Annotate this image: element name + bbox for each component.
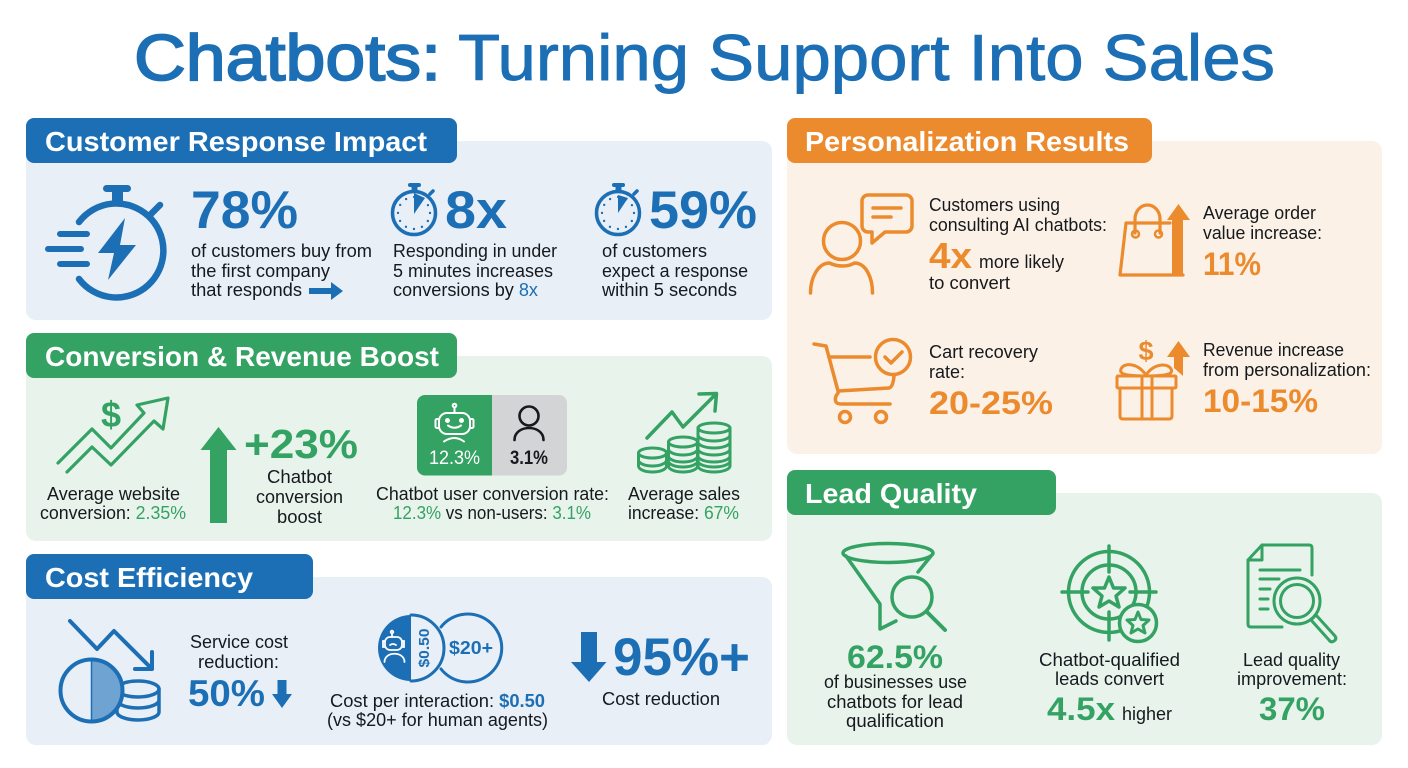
stat: 4.5x higher: leads convert xyxy=(1055,669,1164,689)
icon: document with magnifier xyxy=(1248,545,1336,642)
stat: +23%: conversion xyxy=(256,487,343,507)
stat: 78%: that responds xyxy=(191,280,302,300)
stat: 59%: of customers xyxy=(602,241,707,261)
stat: cart recovery: Cart recovery xyxy=(929,342,1038,362)
stat: 62.5% xyxy=(824,639,967,731)
stat: 4x more likely xyxy=(929,195,1107,293)
stat: 62.5%: chatbots for lead xyxy=(827,692,963,712)
heading: personalization results: Personalization Results xyxy=(805,126,1129,157)
stat: revenue increase xyxy=(1203,340,1371,419)
stat: 59% xyxy=(601,181,757,300)
stat: 4x more likely: Customers using xyxy=(929,195,1060,215)
heading: conversion and revenue boost: Conversion & Revenue Boost xyxy=(45,341,439,372)
stat: 4.5x higher xyxy=(1039,650,1180,727)
icon: target with stars xyxy=(1062,546,1156,642)
title xyxy=(134,21,1275,94)
stat: 78%: the first company xyxy=(191,261,330,281)
stat: 4x more likely: consulting AI chatbots: xyxy=(929,215,1107,235)
stat: 4.5x higher: higher xyxy=(1122,704,1172,724)
icon: person xyxy=(514,406,544,440)
heading: lead quality xyxy=(787,470,1056,515)
icon: funnel with magnifier xyxy=(843,544,945,630)
panel: customer response impact xyxy=(26,118,772,320)
stat: 4x more likely: more likely xyxy=(979,252,1064,272)
icon: up arrow xyxy=(200,427,236,523)
icon: gift with dollar and arrow xyxy=(1117,336,1190,419)
stat: 8x: Responding in under xyxy=(393,241,557,261)
text: average website conversion xyxy=(40,484,186,523)
heading: lead quality: Lead Quality xyxy=(805,478,978,509)
text: average sales increase xyxy=(628,484,740,523)
icon: cost comparison coins xyxy=(376,614,502,682)
stat: 95%+ xyxy=(602,628,750,709)
stat: 37%: improvement: xyxy=(1237,669,1347,689)
stat: 11%: Average order xyxy=(1203,203,1316,223)
stat: 78% xyxy=(191,181,372,300)
icon: stopwatch 59% xyxy=(596,183,640,234)
stat: service cost reduction xyxy=(188,632,292,714)
text: average website conversion: conversion: 2.35% xyxy=(40,503,186,523)
stat: 4.5x higher: Chatbot-qualified xyxy=(1039,650,1180,670)
text: chatbot user conversion rate: 12.3% vs non-users: 3.1% xyxy=(393,503,591,523)
stat: 11% xyxy=(1203,203,1322,282)
stat: 59%: within 5 seconds xyxy=(601,280,737,300)
icon: gift with dollar and arrow: $ xyxy=(1138,336,1154,366)
stat: revenue increase: 10-15% xyxy=(1203,383,1318,419)
text: average sales increase: increase: 67% xyxy=(628,503,739,523)
icon: down arrow xyxy=(272,680,292,708)
stat: 4x more likely: to convert xyxy=(929,273,1010,293)
stat: 78%: 78% xyxy=(191,181,298,240)
stat: 59%: 59% xyxy=(649,181,757,240)
title: Chatbots: xyxy=(134,21,441,94)
icon: shopping bag with up arrow xyxy=(1120,204,1190,276)
stat: +23%: Chatbot xyxy=(267,467,332,487)
panel: conversion and revenue boost xyxy=(26,333,772,541)
icon: right arrow xyxy=(309,282,343,300)
text: chatbot user conversion rate: Chatbot user conversion rate: xyxy=(376,484,609,504)
icon: stopwatch 8x xyxy=(392,183,436,234)
stat: 62.5%: of businesses use xyxy=(824,672,967,692)
text: chatbot user conversion rate xyxy=(376,484,609,523)
stat: 78%: of customers buy from xyxy=(191,241,372,261)
chart: chatbot vs non-user comparison: 12.3% xyxy=(429,448,480,469)
icon: falling cost with coins xyxy=(60,621,159,722)
panel: personalization results xyxy=(787,118,1382,454)
heading: conversion and revenue boost xyxy=(26,333,457,378)
text: average website conversion: Average website xyxy=(47,484,180,504)
stat: cart recovery: rate: xyxy=(929,362,965,382)
stat: 37% xyxy=(1237,650,1347,727)
icon: dollar growth arrow: $ xyxy=(101,394,121,435)
stat: 11%: 11% xyxy=(1203,246,1261,282)
stat: 8x: conversions by 8x xyxy=(393,280,538,300)
stat: 62.5%: qualification xyxy=(846,711,944,731)
chart: chatbot vs non-user comparison xyxy=(417,395,567,476)
stat: service cost reduction: reduction: xyxy=(198,652,279,672)
heading: customer response impact xyxy=(26,118,457,163)
chart: chatbot vs non-user comparison: 3.1% xyxy=(510,448,548,469)
stat: 37%: Lead quality xyxy=(1243,650,1340,670)
heading: cost efficiency: Cost Efficiency xyxy=(45,562,254,593)
stat: 62.5%: 62.5% xyxy=(847,639,943,675)
stat: +23% xyxy=(244,421,358,527)
panel: lead quality xyxy=(787,470,1382,745)
icon: stopwatch with lightning xyxy=(48,185,163,298)
stat: cart recovery: 20-25% xyxy=(929,385,1053,421)
stat: service cost reduction: Service cost xyxy=(190,632,288,652)
stat: revenue increase: Revenue increase xyxy=(1203,340,1344,360)
stat: 8x xyxy=(393,181,557,300)
stat: 11%: value increase: xyxy=(1203,223,1322,243)
stat: 37%: 37% xyxy=(1259,691,1325,727)
heading: personalization results xyxy=(787,118,1152,163)
stat: 95%+: 95%+ xyxy=(613,628,750,687)
stat: 8x: 5 minutes increases xyxy=(393,261,553,281)
text: cost per interaction: (vs $20+ for human agents) xyxy=(327,710,548,730)
icon: robot xyxy=(436,404,474,442)
heading: cost efficiency xyxy=(26,554,313,599)
stat: service cost reduction: 50% xyxy=(188,673,265,714)
stat: 59%: expect a response xyxy=(602,261,748,281)
stat: 95%+: Cost reduction xyxy=(602,689,720,709)
stat: +23%: +23% xyxy=(244,421,358,467)
icon: cost comparison coins: $20+ xyxy=(449,638,493,658)
stat: +23%: boost xyxy=(277,507,322,527)
icon: cart with check xyxy=(814,340,910,422)
icon: person with speech bubble xyxy=(810,195,912,293)
icon: cost comparison coins: $0.50 xyxy=(416,628,433,668)
panel: cost efficiency xyxy=(26,554,772,745)
heading: customer response impact: Customer Response Impact xyxy=(45,126,427,157)
stat: cart recovery xyxy=(929,342,1053,421)
stat: 4.5x higher: 4.5x xyxy=(1047,691,1115,727)
title: Turning Support Into Sales xyxy=(458,21,1275,94)
stat: 4x more likely: 4x xyxy=(929,235,972,276)
icon: coin stacks with growth arrow xyxy=(638,394,730,472)
stat: 8x: 8x xyxy=(445,181,508,240)
text: cost per interaction xyxy=(327,691,548,730)
icon: dollar growth arrow xyxy=(58,394,168,472)
text: cost per interaction: Cost per interaction: $0.50 xyxy=(330,691,545,711)
stat: revenue increase: from personalization: xyxy=(1203,360,1371,380)
icon: large down arrow xyxy=(571,632,606,682)
text: average sales increase: Average sales xyxy=(628,484,740,504)
